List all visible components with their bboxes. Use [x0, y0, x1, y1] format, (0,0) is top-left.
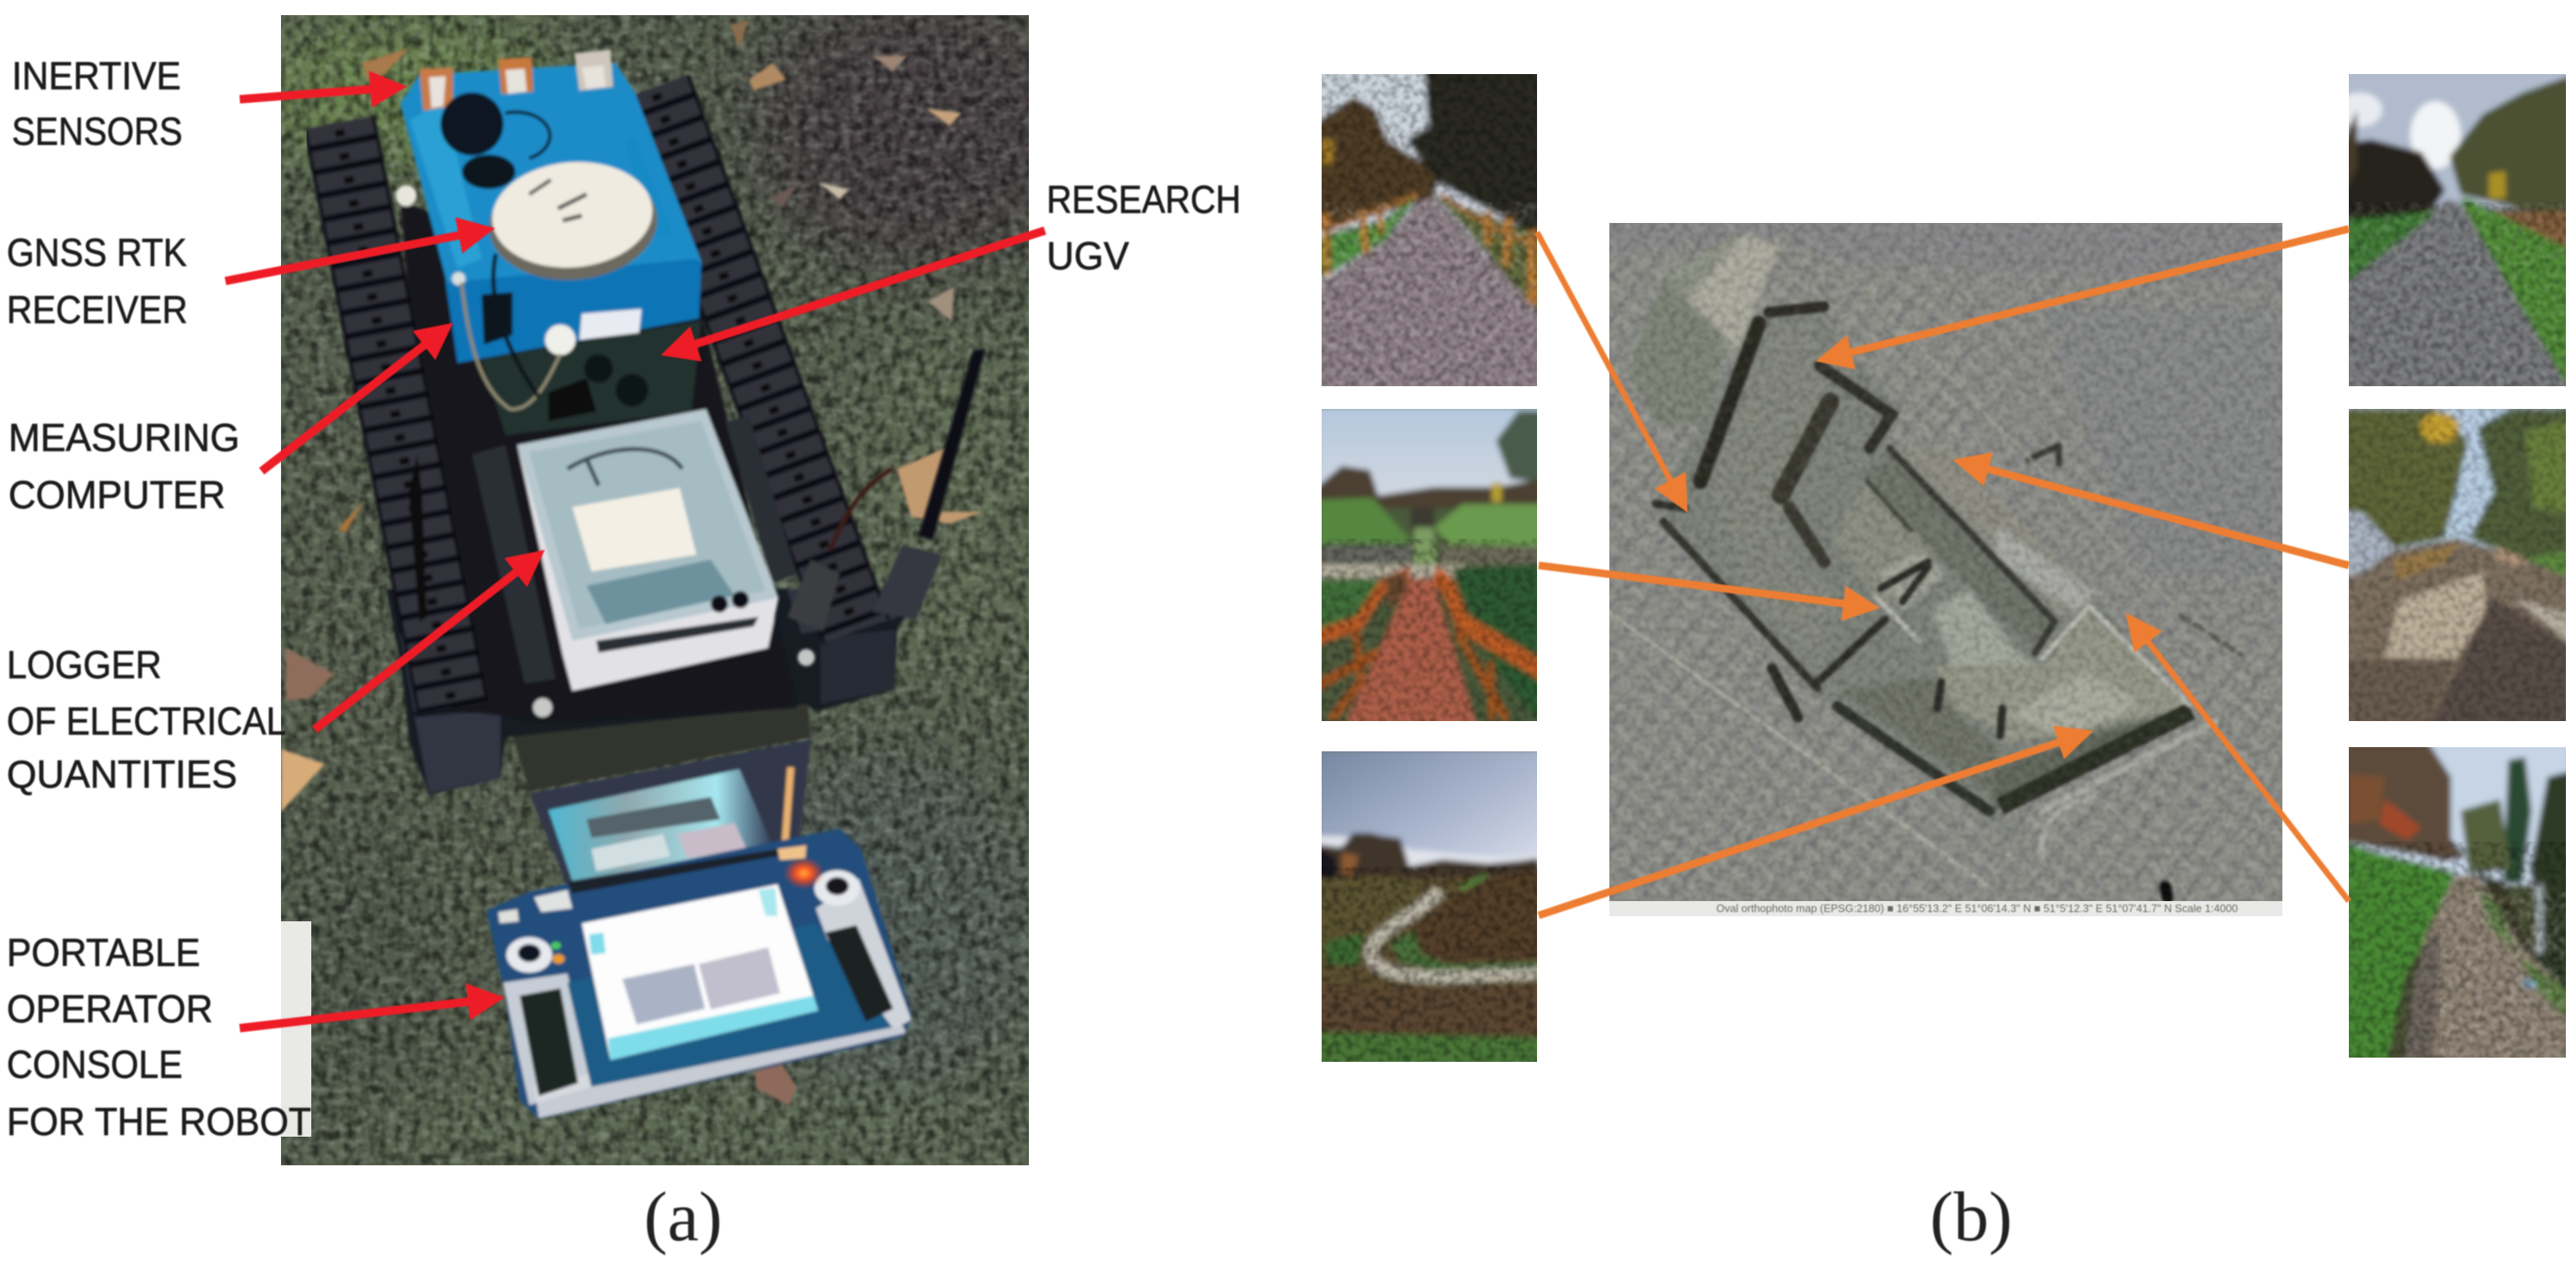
- label: research UGV: RESEARCH: [1047, 178, 1241, 221]
- white backing strip on photo: [281, 921, 311, 1137]
- photo: dirt road with tent and autumn trees: [2343, 406, 2570, 729]
- panel a: photo of the robot on grass: [281, 15, 1029, 1165]
- console body: [486, 829, 912, 1119]
- label: portable operator console for the robot: OPERATOR: [7, 987, 213, 1031]
- left track: [339, 123, 453, 708]
- photo: wooden stairway and green ramparts: [1317, 406, 1544, 729]
- label: portable operator console for the robot: [7, 931, 311, 1143]
- lawn parcels NW of fort: [1625, 232, 1778, 374]
- label: measuring computer: COMPUTER: [8, 473, 225, 517]
- arrow: inertive sensors: [240, 88, 382, 99]
- map attribution strip: [1609, 901, 2282, 916]
- panel b: orthophoto map of the fort: [1607, 219, 2285, 903]
- antennas: [919, 349, 985, 540]
- courtyard: [1932, 588, 2042, 697]
- photo: gravel path with wooden fence: [1317, 67, 1544, 406]
- arrow: research UGV: [685, 231, 1045, 347]
- caption (a): (a): [644, 1178, 723, 1256]
- label: portable operator console for the robot: CONSOLE: [7, 1042, 183, 1086]
- label: logger of electrical quantities: OF ELECTRICAL: [7, 699, 286, 743]
- label: GNSS RTK receiver: [7, 231, 188, 332]
- arrow: photo bottom-left to map: [1539, 739, 2070, 915]
- label: portable operator console for the robot: FOR THE ROBOT: [7, 1100, 311, 1143]
- arrow: photo mid-right to map: [1977, 466, 2349, 565]
- photo: winding path on overgrown slopes: [1317, 749, 1544, 1069]
- label: measuring computer: MEASURING: [8, 416, 240, 459]
- label: research UGV: UGV: [1047, 234, 1129, 278]
- console grips: [520, 989, 578, 1096]
- label: logger of electrical quantities: LOGGER: [7, 643, 162, 687]
- cable coil and puck: [441, 93, 504, 156]
- label: portable operator console for the robot: PORTABLE: [7, 931, 200, 974]
- arrow: measuring computer: [262, 338, 433, 471]
- blue case: [400, 63, 701, 363]
- photo: cobbled path with green slope: [2343, 740, 2570, 1060]
- right track: [656, 87, 856, 631]
- console screen: [582, 884, 819, 1060]
- label: inertive sensors: INERTIVE: [12, 54, 181, 98]
- arrow: operator console: [240, 1000, 480, 1028]
- labels of panel a: [7, 54, 1241, 1143]
- console lid: [529, 740, 811, 886]
- label: GNSS RTK receiver: GNSS RTK: [7, 231, 187, 274]
- label: inertive sensors: SENSORS: [12, 109, 183, 153]
- label: logger of electrical quantities: [7, 643, 286, 796]
- pale paths: [2042, 606, 2189, 704]
- label: inertive sensors: [12, 54, 183, 153]
- arrow: photo bottom-right to map: [2141, 633, 2349, 901]
- joysticks and indicators: [506, 937, 552, 973]
- fort body: [1655, 312, 2193, 851]
- map attribution strip: Oval orthophoto map (EPSG:2180) ■ 16°55'13.2" E 51°06'14.3" N ■ 51°5'12.3" E 51°07'41.7" N Scale 1:4000: [1716, 902, 2238, 915]
- label: logger of electrical quantities: QUANTITIES: [7, 752, 237, 796]
- photo: gravel road between grass verges: [2337, 67, 2570, 390]
- label: GNSS RTK receiver: RECEIVER: [7, 288, 188, 332]
- logger box: [515, 446, 781, 693]
- arrow: logger: [315, 565, 525, 729]
- arrow: photo mid-left to map: [1539, 565, 1855, 605]
- GNSS dome: [487, 197, 660, 283]
- inertial sensors: [420, 67, 453, 111]
- arrow: GNSS RTK receiver: [225, 233, 470, 281]
- moat shadows: [1700, 323, 1759, 481]
- red arrows of panel a: [225, 88, 1045, 1028]
- caption (b): (b): [1930, 1178, 2012, 1256]
- label: measuring computer: [8, 416, 240, 517]
- leaves on the grass: [281, 20, 983, 1106]
- portable operator console: [486, 740, 912, 1119]
- label: research UGV: [1047, 178, 1241, 278]
- robot: tracks, case, antenna dome, logger box: [339, 50, 985, 722]
- arrow: photo top-left to map: [1537, 232, 1676, 491]
- arrow: photo top-right to map: [1840, 229, 2349, 355]
- orange arrows linking photos to the map: [1537, 229, 2349, 915]
- robot lower chassis and tracks: [386, 589, 923, 795]
